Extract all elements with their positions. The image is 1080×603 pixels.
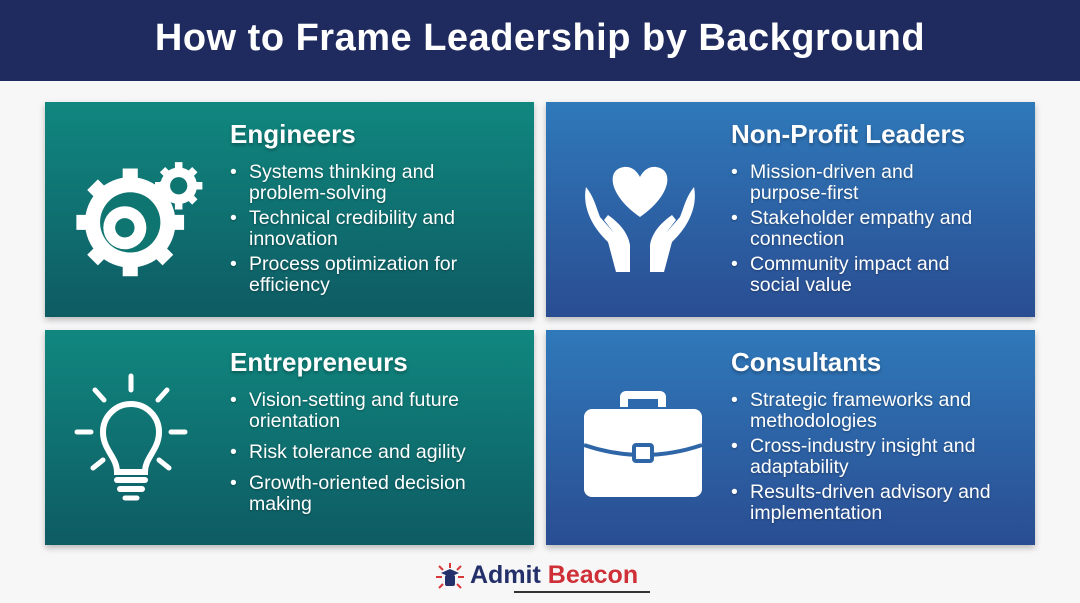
bullets: adaptability [750, 456, 849, 478]
bullets: Stakeholder empathy and [750, 207, 972, 229]
bullets: Community impact and [750, 253, 949, 275]
bullets: Cross-industry insight and [750, 435, 975, 457]
panel: engineers [45, 102, 534, 317]
bullets [731, 161, 972, 296]
bullets [230, 161, 457, 296]
bullets: Vision-setting and future [249, 389, 459, 411]
bullets: efficiency [249, 274, 330, 296]
title [0, 0, 1080, 81]
icon: lightbulb [74, 374, 188, 500]
bullets: Process optimization for [249, 253, 457, 275]
panel: consultants [546, 330, 1035, 545]
bullets: Strategic frameworks and [750, 389, 971, 411]
bullets: orientation [249, 410, 340, 432]
icon: beacon [436, 563, 464, 589]
icon: briefcase [584, 391, 702, 497]
bullets: implementation [750, 502, 882, 524]
bullets: Mission-driven and [750, 161, 914, 183]
heading: Consultants [731, 347, 881, 377]
panel: entrepreneurs [45, 330, 534, 545]
logo: Admit Beacon [470, 561, 638, 589]
icon: gears [76, 162, 202, 276]
bullets: Systems thinking and [249, 161, 434, 183]
logo [436, 561, 650, 593]
icon: heart in hands [585, 166, 695, 272]
bullets: Results-driven advisory and [750, 481, 991, 503]
bullets: purpose-first [750, 182, 858, 204]
bullets [731, 389, 991, 524]
heading: Non-Profit Leaders [731, 119, 965, 149]
bullets: problem-solving [249, 182, 387, 204]
bullets: Growth-oriented decision [249, 472, 466, 494]
bullets: Technical credibility and [249, 207, 455, 229]
bullets: Risk tolerance and agility [249, 441, 466, 463]
bullets [230, 389, 466, 516]
heading: Engineers [230, 119, 356, 149]
bullets: methodologies [750, 410, 877, 432]
bullets: social value [750, 274, 852, 296]
heading: Entrepreneurs [230, 347, 408, 377]
bullets: innovation [249, 228, 338, 250]
bullets: making [249, 493, 312, 515]
panel: non-profit [546, 102, 1035, 317]
bullets: connection [750, 228, 844, 250]
title: How to Frame Leadership by Background [155, 17, 925, 59]
